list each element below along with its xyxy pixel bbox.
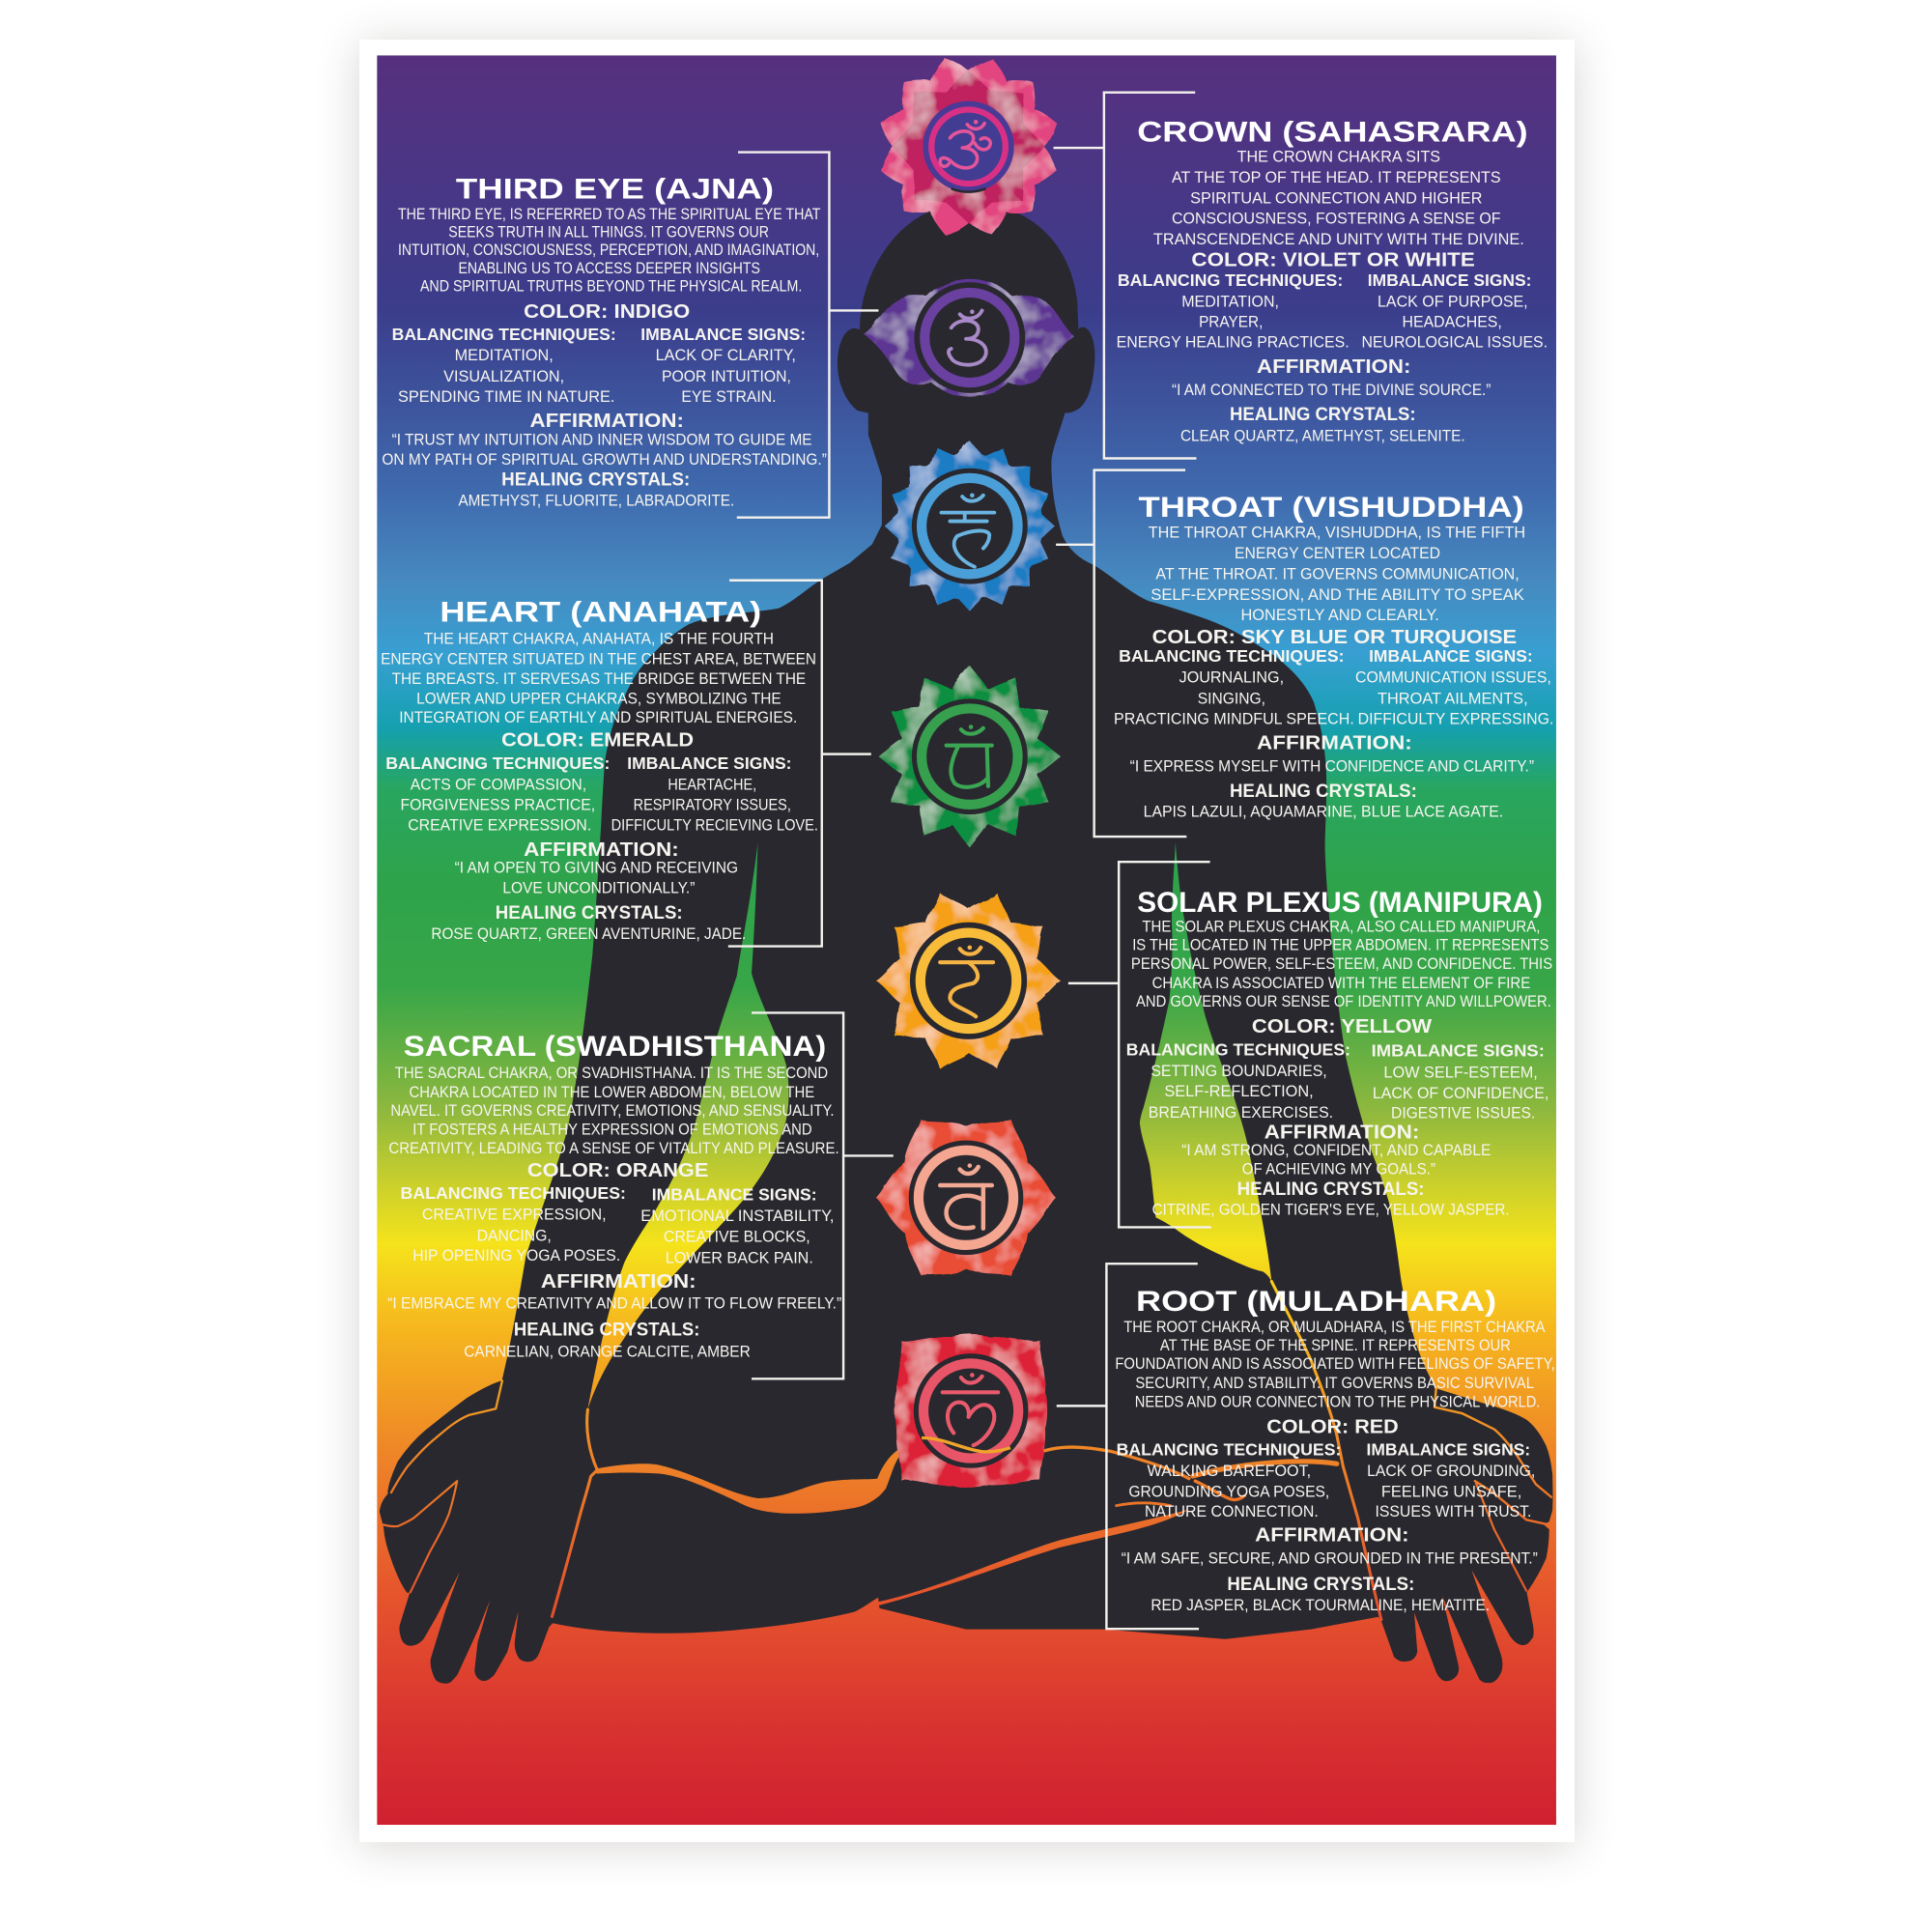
description: root: FOUNDATION AND IS ASSOCIATED WITH FEELINGS OF SAFETY, (1115, 1354, 1555, 1373)
imbalance signs: COMMUNICATION ISSUES, (1355, 668, 1551, 687)
description: throat: AT THE THROAT. IT GOVERNS COMMUNICATION, (1155, 564, 1520, 582)
description: throat: SELF-EXPRESSION, AND THE ABILITY TO SPEAK (1151, 585, 1524, 604)
imbalance signs: LACK OF CONFIDENCE, (1373, 1084, 1548, 1102)
color: red: COLOR: RED (1266, 1416, 1399, 1437)
balancing techniques (392, 325, 616, 406)
healing crystals: CARNELIAN, ORANGE CALCITE, AMBER (464, 1342, 751, 1360)
description: root: SECURITY, AND STABILITY. IT GOVERNS BASIC SURVIVAL (1135, 1374, 1534, 1392)
imbalance signs (1372, 1041, 1548, 1122)
poster card (359, 40, 1575, 1842)
affirmation (1122, 1525, 1538, 1568)
panel: crown (1117, 117, 1548, 445)
panel: third eye (382, 173, 827, 510)
description: sacral: THE SACRAL CHAKRA, OR SVADHISTHANA. IT IS THE SECOND (395, 1064, 828, 1082)
healing crystals: HEALING CRYSTALS: (1237, 1179, 1424, 1200)
balancing techniques: DANCING, (477, 1226, 552, 1244)
healing crystals: LAPIS LAZULI, AQUAMARINE, BLUE LACE AGATE. (1144, 803, 1503, 821)
healing crystals: HEALING CRYSTALS: (1230, 781, 1417, 802)
imbalance signs: IMBALANCE SIGNS: (1368, 270, 1531, 290)
healing crystals (458, 470, 734, 510)
description: solar plexus: CHAKRA IS ASSOCIATED WITH THE ELEMENT OF FIRE (1152, 974, 1530, 992)
panel: root (1115, 1286, 1555, 1614)
healing crystals (1180, 405, 1465, 445)
balancing techniques: HIP OPENING YOGA POSES. (412, 1246, 620, 1264)
description: third eye: SEEKS TRUTH IN ALL THINGS. IT GOVERNS OUR (448, 223, 769, 242)
description: third eye: AND SPIRITUAL TRUTHS BEYOND THE PHYSICAL REALM. (420, 277, 802, 296)
chakra: throat (885, 441, 1055, 611)
balancing techniques: CREATIVE EXPRESSION. (408, 816, 591, 835)
balancing techniques: BALANCING TECHNIQUES: (1119, 646, 1345, 666)
balancing techniques: MEDITATION, (455, 346, 554, 364)
balancing techniques: BALANCING TECHNIQUES: (1117, 1439, 1341, 1459)
heading: sacral: SACRAL (SWADHISTHANA) (404, 1031, 826, 1063)
description: crown: CONSCIOUSNESS, FOSTERING A SENSE OF (1172, 210, 1501, 228)
healing crystals: HEALING CRYSTALS: (496, 903, 683, 923)
heading: throat: THROAT (VISHUDDHA) (1139, 492, 1524, 524)
affirmation: AFFIRMATION: (1255, 1525, 1409, 1547)
affirmation (1172, 356, 1491, 399)
heading: solar plexus: SOLAR PLEXUS (MANIPURA) (1137, 887, 1543, 919)
panel: sacral (387, 1031, 841, 1360)
imbalance signs: FEELING UNSAFE, (1381, 1483, 1521, 1501)
imbalance signs (1355, 646, 1553, 727)
description: crown: THE CROWN CHAKRA SITS (1237, 148, 1440, 166)
healing crystals: ROSE QUARTZ, GREEN AVENTURINE, JADE. (431, 924, 746, 943)
healing crystals: CITRINE, GOLDEN TIGER'S EYE, YELLOW JASPER. (1152, 1201, 1509, 1219)
balancing techniques: SELF-REFLECTION, (1164, 1082, 1314, 1100)
balancing techniques (1114, 646, 1354, 727)
description: sacral: CREATIVITY, LEADING TO A SENSE OF VITALITY AND PLEASURE. (388, 1139, 839, 1157)
heading: third eye: THIRD EYE (AJNA) (456, 173, 774, 205)
imbalance signs (640, 325, 806, 406)
balancing techniques: ENERGY HEALING PRACTICES. (1117, 333, 1350, 352)
description: solar plexus (1131, 917, 1552, 1010)
balancing techniques (1117, 1439, 1341, 1520)
balancing techniques (1117, 270, 1350, 352)
description: root (1115, 1318, 1555, 1411)
description: solar plexus: PERSONAL POWER, SELF-ESTEEM, AND CONFIDENCE. THIS (1131, 954, 1552, 973)
heading: heart: HEART (ANAHATA) (440, 596, 761, 628)
imbalance signs: EMOTIONAL INSTABILITY, (640, 1207, 835, 1225)
chakra: third eye (864, 278, 1074, 397)
description: heart: LOWER AND UPPER CHAKRAS, SYMBOLIZING THE (416, 689, 781, 707)
description: sacral: IT FOSTERS A HEALTHY EXPRESSION OF EMOTIONS AND (412, 1121, 812, 1139)
description: crown: AT THE TOP OF THE HEAD. IT REPRESENTS (1172, 168, 1501, 186)
imbalance signs (1361, 270, 1548, 352)
imbalance signs: THROAT AILMENTS, (1378, 689, 1528, 707)
balancing techniques: WALKING BAREFOOT, (1148, 1462, 1311, 1480)
imbalance signs: ISSUES WITH TRUST. (1375, 1502, 1531, 1520)
affirmation: AFFIRMATION: (529, 411, 684, 432)
affirmation (382, 411, 827, 469)
balancing techniques: BALANCING TECHNIQUES: (1118, 270, 1343, 290)
balancing techniques (1126, 1039, 1350, 1122)
gap under left thigh (596, 1446, 906, 1514)
description: solar plexus: IS THE LOCATED IN THE UPPER ABDOMEN. IT REPRESENTS (1132, 935, 1548, 953)
healing crystals (464, 1321, 751, 1360)
chakra: heart (878, 666, 1061, 848)
description: solar plexus: AND GOVERNS OUR SENSE OF IDENTITY AND WILLPOWER. (1136, 992, 1551, 1010)
imbalance signs: IMBALANCE SIGNS: (1367, 1439, 1530, 1459)
healing crystals: HEALING CRYSTALS: (1230, 405, 1416, 425)
affirmation: “I EXPRESS MYSELF WITH CONFIDENCE AND CLARITY.” (1130, 756, 1534, 775)
description: sacral: NAVEL. IT GOVERNS CREATIVITY, EMOTIONS, AND SENSUALITY. (390, 1101, 835, 1120)
affirmation: AFFIRMATION: (1264, 1122, 1419, 1144)
gap between right arm and torso (1140, 842, 1271, 1282)
color: violet or white: COLOR: VIOLET OR WHITE (1191, 250, 1475, 271)
affirmation: AFFIRMATION: (541, 1271, 696, 1293)
imbalance signs: DIGESTIVE ISSUES. (1391, 1104, 1535, 1122)
balancing techniques: BALANCING TECHNIQUES: (401, 1183, 626, 1203)
gap between crossed legs (878, 1509, 1189, 1605)
balancing techniques: BALANCING TECHNIQUES: (392, 325, 616, 344)
imbalance signs: LOW SELF-ESTEEM, (1383, 1063, 1538, 1081)
imbalance signs: DIFFICULTY RECIEVING LOVE. (611, 816, 818, 835)
imbalance signs: LACK OF PURPOSE, (1378, 293, 1528, 311)
imbalance signs: IMBALANCE SIGNS: (1369, 646, 1533, 666)
balancing techniques: SPENDING TIME IN NATURE. (398, 387, 614, 406)
chakra: solar plexus (876, 886, 1061, 1076)
description: third eye: ENABLING US TO ACCESS DEEPER INSIGHTS (458, 259, 760, 277)
description: root: NEEDS AND OUR CONNECTION TO THE PHYSICAL WORLD. (1135, 1393, 1540, 1411)
chakra: sacral (876, 1098, 1056, 1296)
description: root: AT THE BASE OF THE SPINE. IT REPRESENTS OUR (1160, 1336, 1511, 1354)
description: throat: THE THROAT CHAKRA, VISHUDDHA, IS THE FIFTH (1149, 524, 1525, 542)
affirmation (387, 1271, 841, 1313)
connector brackets (728, 93, 1211, 1629)
description: heart: THE BREASTS. IT SERVESAS THE BRIDGE BETWEEN THE (392, 669, 806, 688)
affirmation: OF ACHIEVING MY GOALS.” (1242, 1160, 1435, 1179)
heading: crown: CROWN (SAHASRARA) (1137, 117, 1528, 149)
affirmation: “I TRUST MY INTUITION AND INNER WISDOM TO GUIDE ME (392, 430, 812, 448)
color: yellow: COLOR: YELLOW (1252, 1016, 1433, 1037)
description: throat: ENERGY CENTER LOCATED (1235, 544, 1440, 562)
description: throat (1149, 524, 1525, 624)
affirmation (1181, 1122, 1491, 1179)
description: third eye: INTUITION, CONSCIOUSNESS, PERCEPTION, AND IMAGINATION, (398, 241, 819, 259)
description: heart (381, 629, 816, 726)
imbalance signs: RESPIRATORY ISSUES, (634, 796, 791, 814)
affirmation: “I AM STRONG, CONFIDENT, AND CAPABLE (1181, 1141, 1491, 1159)
affirmation (455, 839, 738, 897)
balancing techniques: JOURNALING, (1179, 668, 1284, 687)
healing crystals: AMETHYST, FLUORITE, LABRADORITE. (458, 492, 734, 510)
imbalance signs: IMBALANCE SIGNS: (640, 325, 806, 344)
healing crystals: HEALING CRYSTALS: (514, 1321, 699, 1341)
description: crown (1153, 148, 1524, 248)
balancing techniques: ACTS OF COMPASSION, (411, 776, 586, 794)
imbalance signs: HEARTACHE, (668, 776, 756, 794)
color: sky blue or turquoise: COLOR: SKY BLUE OR TURQUOISE (1152, 627, 1517, 648)
balancing techniques: PRACTICING MINDFUL SPEECH. (1114, 709, 1354, 727)
balancing techniques: SINGING, (1198, 689, 1265, 707)
description: solar plexus: THE SOLAR PLEXUS CHAKRA, ALSO CALLED MANIPURA, (1142, 917, 1540, 935)
description: heart: THE HEART CHAKRA, ANAHATA, IS THE FOURTH (424, 629, 774, 647)
description: sacral: CHAKRA LOCATED IN THE LOWER ABDOMEN, BELOW THE (409, 1083, 814, 1101)
description: heart: INTEGRATION OF EARTHLY AND SPIRITUAL ENERGIES. (399, 708, 797, 726)
healing crystals: HEALING CRYSTALS: (1227, 1575, 1414, 1595)
balancing techniques: PRAYER, (1199, 313, 1263, 331)
description: throat: HONESTLY AND CLEARLY. (1240, 606, 1439, 624)
affirmation: LOVE UNCONDITIONALLY.” (502, 879, 695, 897)
imbalance signs: NEUROLOGICAL ISSUES. (1361, 333, 1548, 352)
imbalance signs: LACK OF GROUNDING, (1367, 1462, 1535, 1480)
balancing techniques: BALANCING TECHNIQUES: (1126, 1039, 1350, 1059)
healing crystals: CLEAR QUARTZ, AMETHYST, SELENITE. (1180, 427, 1465, 445)
imbalance signs: DIFFICULTY EXPRESSING. (1358, 709, 1553, 727)
affirmation: “I AM SAFE, SECURE, AND GROUNDED IN THE PRESENT.” (1122, 1549, 1538, 1568)
description: crown: TRANSCENDENCE AND UNITY WITH THE DIVINE. (1153, 230, 1524, 248)
imbalance signs: CREATIVE BLOCKS, (664, 1228, 810, 1246)
balancing techniques: VISUALIZATION, (443, 367, 564, 385)
seated figure silhouette (380, 203, 1552, 1683)
chakra: crown (874, 52, 1063, 241)
color: emerald: COLOR: EMERALD (501, 729, 694, 751)
affirmation: AFFIRMATION: (1257, 733, 1412, 754)
chakra: root (863, 1303, 1079, 1519)
balancing techniques: GROUNDING YOGA POSES, (1128, 1483, 1329, 1501)
imbalance signs: HEADACHES, (1403, 313, 1502, 331)
imbalance signs: POOR INTUITION, (662, 367, 791, 385)
description: third eye: THE THIRD EYE, IS REFERRED TO AS THE SPIRITUAL EYE THAT (398, 205, 820, 223)
healing crystals: RED JASPER, BLACK TOURMALINE, HEMATITE. (1151, 1596, 1490, 1614)
balancing techniques: FORGIVENESS PRACTICE, (401, 796, 595, 814)
panel: throat (1114, 492, 1553, 821)
affirmation: “I AM CONNECTED TO THE DIVINE SOURCE.” (1172, 381, 1491, 399)
description: sacral (388, 1064, 839, 1157)
affirmation: AFFIRMATION: (1257, 356, 1410, 378)
balancing techniques: CREATIVE EXPRESSION, (422, 1206, 607, 1224)
healing crystals (1144, 781, 1503, 821)
balancing techniques (401, 1183, 626, 1264)
panel: solar plexus (1126, 887, 1552, 1219)
affirmation: AFFIRMATION: (524, 839, 679, 861)
affirmation: ON MY PATH OF SPIRITUAL GROWTH AND UNDERSTANDING.” (382, 450, 827, 469)
balancing techniques: NATURE CONNECTION. (1145, 1502, 1319, 1520)
imbalance signs (640, 1184, 835, 1266)
imbalance signs: LACK OF CLARITY, (656, 346, 796, 364)
description: root: THE ROOT CHAKRA, OR MULADHARA, IS THE FIRST CHAKRA (1123, 1318, 1546, 1336)
imbalance signs: LOWER BACK PAIN. (666, 1248, 813, 1266)
imbalance signs: EYE STRAIN. (681, 387, 777, 406)
description: crown: SPIRITUAL CONNECTION AND HIGHER (1190, 188, 1482, 207)
affirmation: “I AM OPEN TO GIVING AND RECEIVING (455, 859, 738, 877)
healing crystals (1151, 1575, 1490, 1614)
healing crystals (1152, 1179, 1509, 1219)
healing crystals: HEALING CRYSTALS: (501, 470, 690, 491)
description: heart: ENERGY CENTER SITUATED IN THE CHEST AREA, BETWEEN (381, 649, 816, 668)
color: indigo: COLOR: INDIGO (524, 301, 690, 323)
description: third eye (398, 205, 820, 296)
imbalance signs: IMBALANCE SIGNS: (652, 1184, 817, 1204)
affirmation: “I EMBRACE MY CREATIVITY AND ALLOW IT TO FLOW FREELY.” (387, 1294, 841, 1313)
gap between left arm and torso (587, 842, 789, 1409)
balancing techniques: SETTING BOUNDARIES, (1151, 1062, 1327, 1080)
gradient background panel (377, 55, 1556, 1825)
panel: heart (381, 596, 818, 943)
imbalance signs: IMBALANCE SIGNS: (1372, 1041, 1545, 1061)
color: orange: COLOR: ORANGE (527, 1160, 708, 1181)
healing crystals (431, 903, 746, 943)
balancing techniques: BREATHING EXERCISES. (1149, 1103, 1333, 1122)
balancing techniques: MEDITATION, (1181, 293, 1279, 311)
imbalance signs (611, 753, 818, 835)
balancing techniques: BALANCING TECHNIQUES: (385, 753, 610, 773)
imbalance signs (1367, 1439, 1535, 1520)
balancing techniques (385, 753, 610, 835)
heading: root: ROOT (MULADHARA) (1136, 1286, 1496, 1318)
affirmation (1130, 733, 1534, 775)
imbalance signs: IMBALANCE SIGNS: (627, 753, 792, 773)
